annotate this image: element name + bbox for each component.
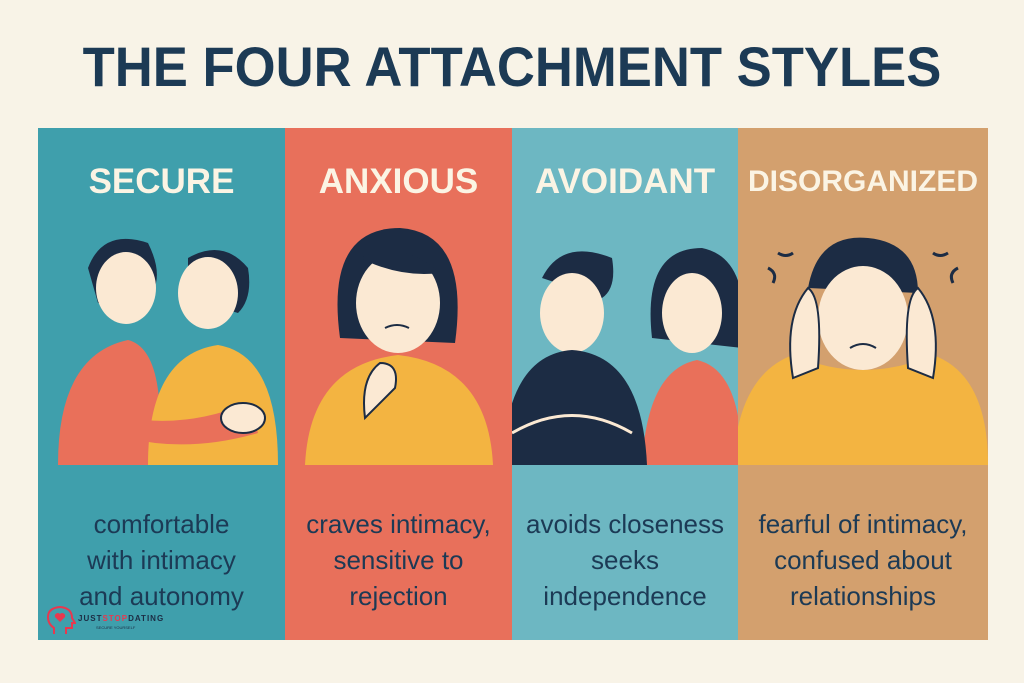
description: anxious: rejection: [349, 581, 448, 611]
description: disorganized: relationships: [790, 581, 936, 611]
description: avoidant: avoids closeness: [526, 509, 724, 539]
logo: SECURE YOURSELF: [96, 625, 135, 630]
description: disorganized: confused about: [774, 545, 952, 575]
description: avoidant: seeks: [591, 545, 659, 575]
description: secure: comfortable: [94, 509, 229, 539]
heading: disorganized: DISORGANIZED: [748, 165, 978, 198]
heading: avoidant: AVOIDANT: [535, 162, 715, 201]
heading: anxious: ANXIOUS: [319, 162, 478, 201]
description: anxious: craves intimacy,: [306, 509, 491, 539]
description: avoidant: independence: [543, 581, 707, 611]
logo: [47, 606, 164, 634]
description: secure: with intimacy: [87, 545, 236, 575]
logo: JUSTSTOPDATING: [78, 614, 164, 623]
illustration: turned away couple: [512, 248, 738, 465]
description: anxious: sensitive to: [333, 545, 464, 575]
illustration: worried woman: [305, 228, 493, 465]
illustration: distressed person: [738, 238, 988, 465]
description: avoidant: [526, 509, 724, 611]
panel: anxious: [285, 128, 512, 640]
panel: secure: [38, 128, 285, 640]
description: secure: and autonomy: [79, 581, 244, 611]
panel: avoidant: [512, 128, 738, 640]
illustration: embracing couple: [58, 238, 278, 465]
title: THE FOUR ATTACHMENT STYLES: [83, 35, 941, 98]
description: disorganized: [758, 509, 968, 611]
description: anxious: [306, 509, 491, 611]
heading: secure: SECURE: [89, 162, 234, 201]
description: disorganized: fearful of intimacy,: [758, 509, 968, 539]
panel: disorganized: [738, 128, 988, 640]
description: secure: [79, 509, 244, 611]
